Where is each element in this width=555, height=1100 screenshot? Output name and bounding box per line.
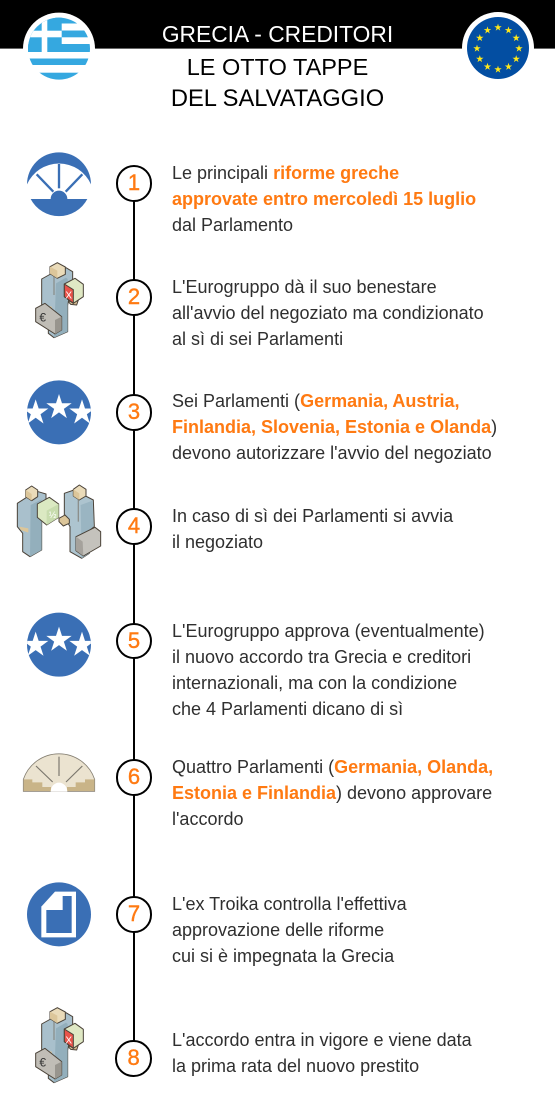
step 7 number: 7 <box>128 901 140 926</box>
icon: man with briefcase and rejected package, step 8: € <box>39 1056 46 1070</box>
step 2 text: all'avvio del negoziato ma condizionato <box>172 303 484 323</box>
icon: man with briefcase and rejected package, step 8 <box>36 1008 83 1083</box>
icon: three stars, step 5 <box>27 612 91 677</box>
step 2 number <box>116 279 152 316</box>
icon: man with briefcase and rejected package, step 2: X <box>65 290 72 301</box>
step 3 text <box>172 391 497 463</box>
step 4 text: In caso di sì dei Parlamenti si avvia <box>172 506 453 526</box>
step 8 text: la prima rata del nuovo prestito <box>172 1056 419 1076</box>
step 1 number: 1 <box>128 170 140 195</box>
step 5 text <box>172 621 485 719</box>
step 1 text: Le principali riforme greche <box>172 163 399 183</box>
title: second line: LE OTTO TAPPE <box>187 54 368 80</box>
step 3 number: 3 <box>128 399 140 424</box>
icon: parliament hemicycle, step 6 <box>23 754 95 792</box>
step 6 text: l'accordo <box>172 809 243 829</box>
step 2 text: L'Eurogruppo dà il suo benestare <box>172 277 437 297</box>
step 5 number: 5 <box>128 628 140 653</box>
step 6 number: 6 <box>128 764 140 789</box>
step 6 text: Quattro Parlamenti (Germania, Olanda, <box>172 757 493 777</box>
step 5 text: internazionali, ma con la condizione <box>172 673 457 693</box>
step 4 number: 4 <box>128 513 140 538</box>
step 7 text: approvazione delle riforme <box>172 920 384 940</box>
step 1 text: approvate entro mercoledì 15 luglio <box>172 189 476 209</box>
step 2 text: al sì di sei Parlamenti <box>172 329 343 349</box>
step 4 text <box>172 506 454 552</box>
step 7 text: L'ex Troika controlla l'effettiva <box>172 894 407 914</box>
step 2 text <box>172 277 484 349</box>
icon: document, step 7 <box>27 882 91 946</box>
step 1 text: dal Parlamento <box>172 215 293 235</box>
icon: parliament, blue <box>27 152 91 216</box>
step 2 number: 2 <box>128 284 140 309</box>
icon: two men exchanging a package, step 4: ½ <box>49 510 57 520</box>
title: first line: GRECIA - CREDITORI <box>162 21 393 47</box>
step 3 number <box>116 394 152 431</box>
step 4 text: il negoziato <box>172 532 263 552</box>
step 7 text: cui si è impegnata la Grecia <box>172 946 394 966</box>
step 5 text: L'Eurogruppo approva (eventualmente) <box>172 621 485 641</box>
step 8 number: 8 <box>127 1045 140 1070</box>
step 6 number <box>116 759 152 796</box>
icon: Greek flag <box>23 13 95 85</box>
step 3 text: Sei Parlamenti (Germania, Austria, <box>172 391 459 411</box>
step 5 text: che 4 Parlamenti dicano di sì <box>172 699 403 719</box>
step 3 text: devono autorizzare l'avvio del negoziato <box>172 443 492 463</box>
step 7 number <box>116 896 152 933</box>
icon: two men exchanging a package, step 4 <box>17 485 101 558</box>
header black band <box>0 0 555 49</box>
icon: man with briefcase and rejected package, step 8: X <box>65 1035 72 1046</box>
step 8 number <box>115 1040 152 1077</box>
icon: EU flag <box>462 12 534 84</box>
icon: man with briefcase and rejected package, step 2 <box>36 263 83 338</box>
step 1 text <box>172 163 476 235</box>
step 7 text <box>172 894 407 966</box>
step 8 text <box>172 1030 472 1076</box>
step 5 number <box>116 623 152 659</box>
step 1 number <box>116 165 152 202</box>
step 3 text: Finlandia, Slovenia, Estonia e Olanda) <box>172 417 497 437</box>
step 8 text: L'accordo entra in vigore e viene data <box>172 1030 472 1050</box>
step 5 text: il nuovo accordo tra Grecia e creditori <box>172 647 471 667</box>
title: third line: DEL SALVATAGGIO <box>171 86 384 112</box>
step 6 text <box>172 757 493 829</box>
icon: man with briefcase and rejected package, step 2: € <box>39 311 46 325</box>
icon: three stars, step 3 <box>27 380 91 444</box>
timeline vertical line <box>133 183 135 1043</box>
step 6 text: Estonia e Finlandia) devono approvare <box>172 783 492 803</box>
step 4 number <box>116 508 152 545</box>
